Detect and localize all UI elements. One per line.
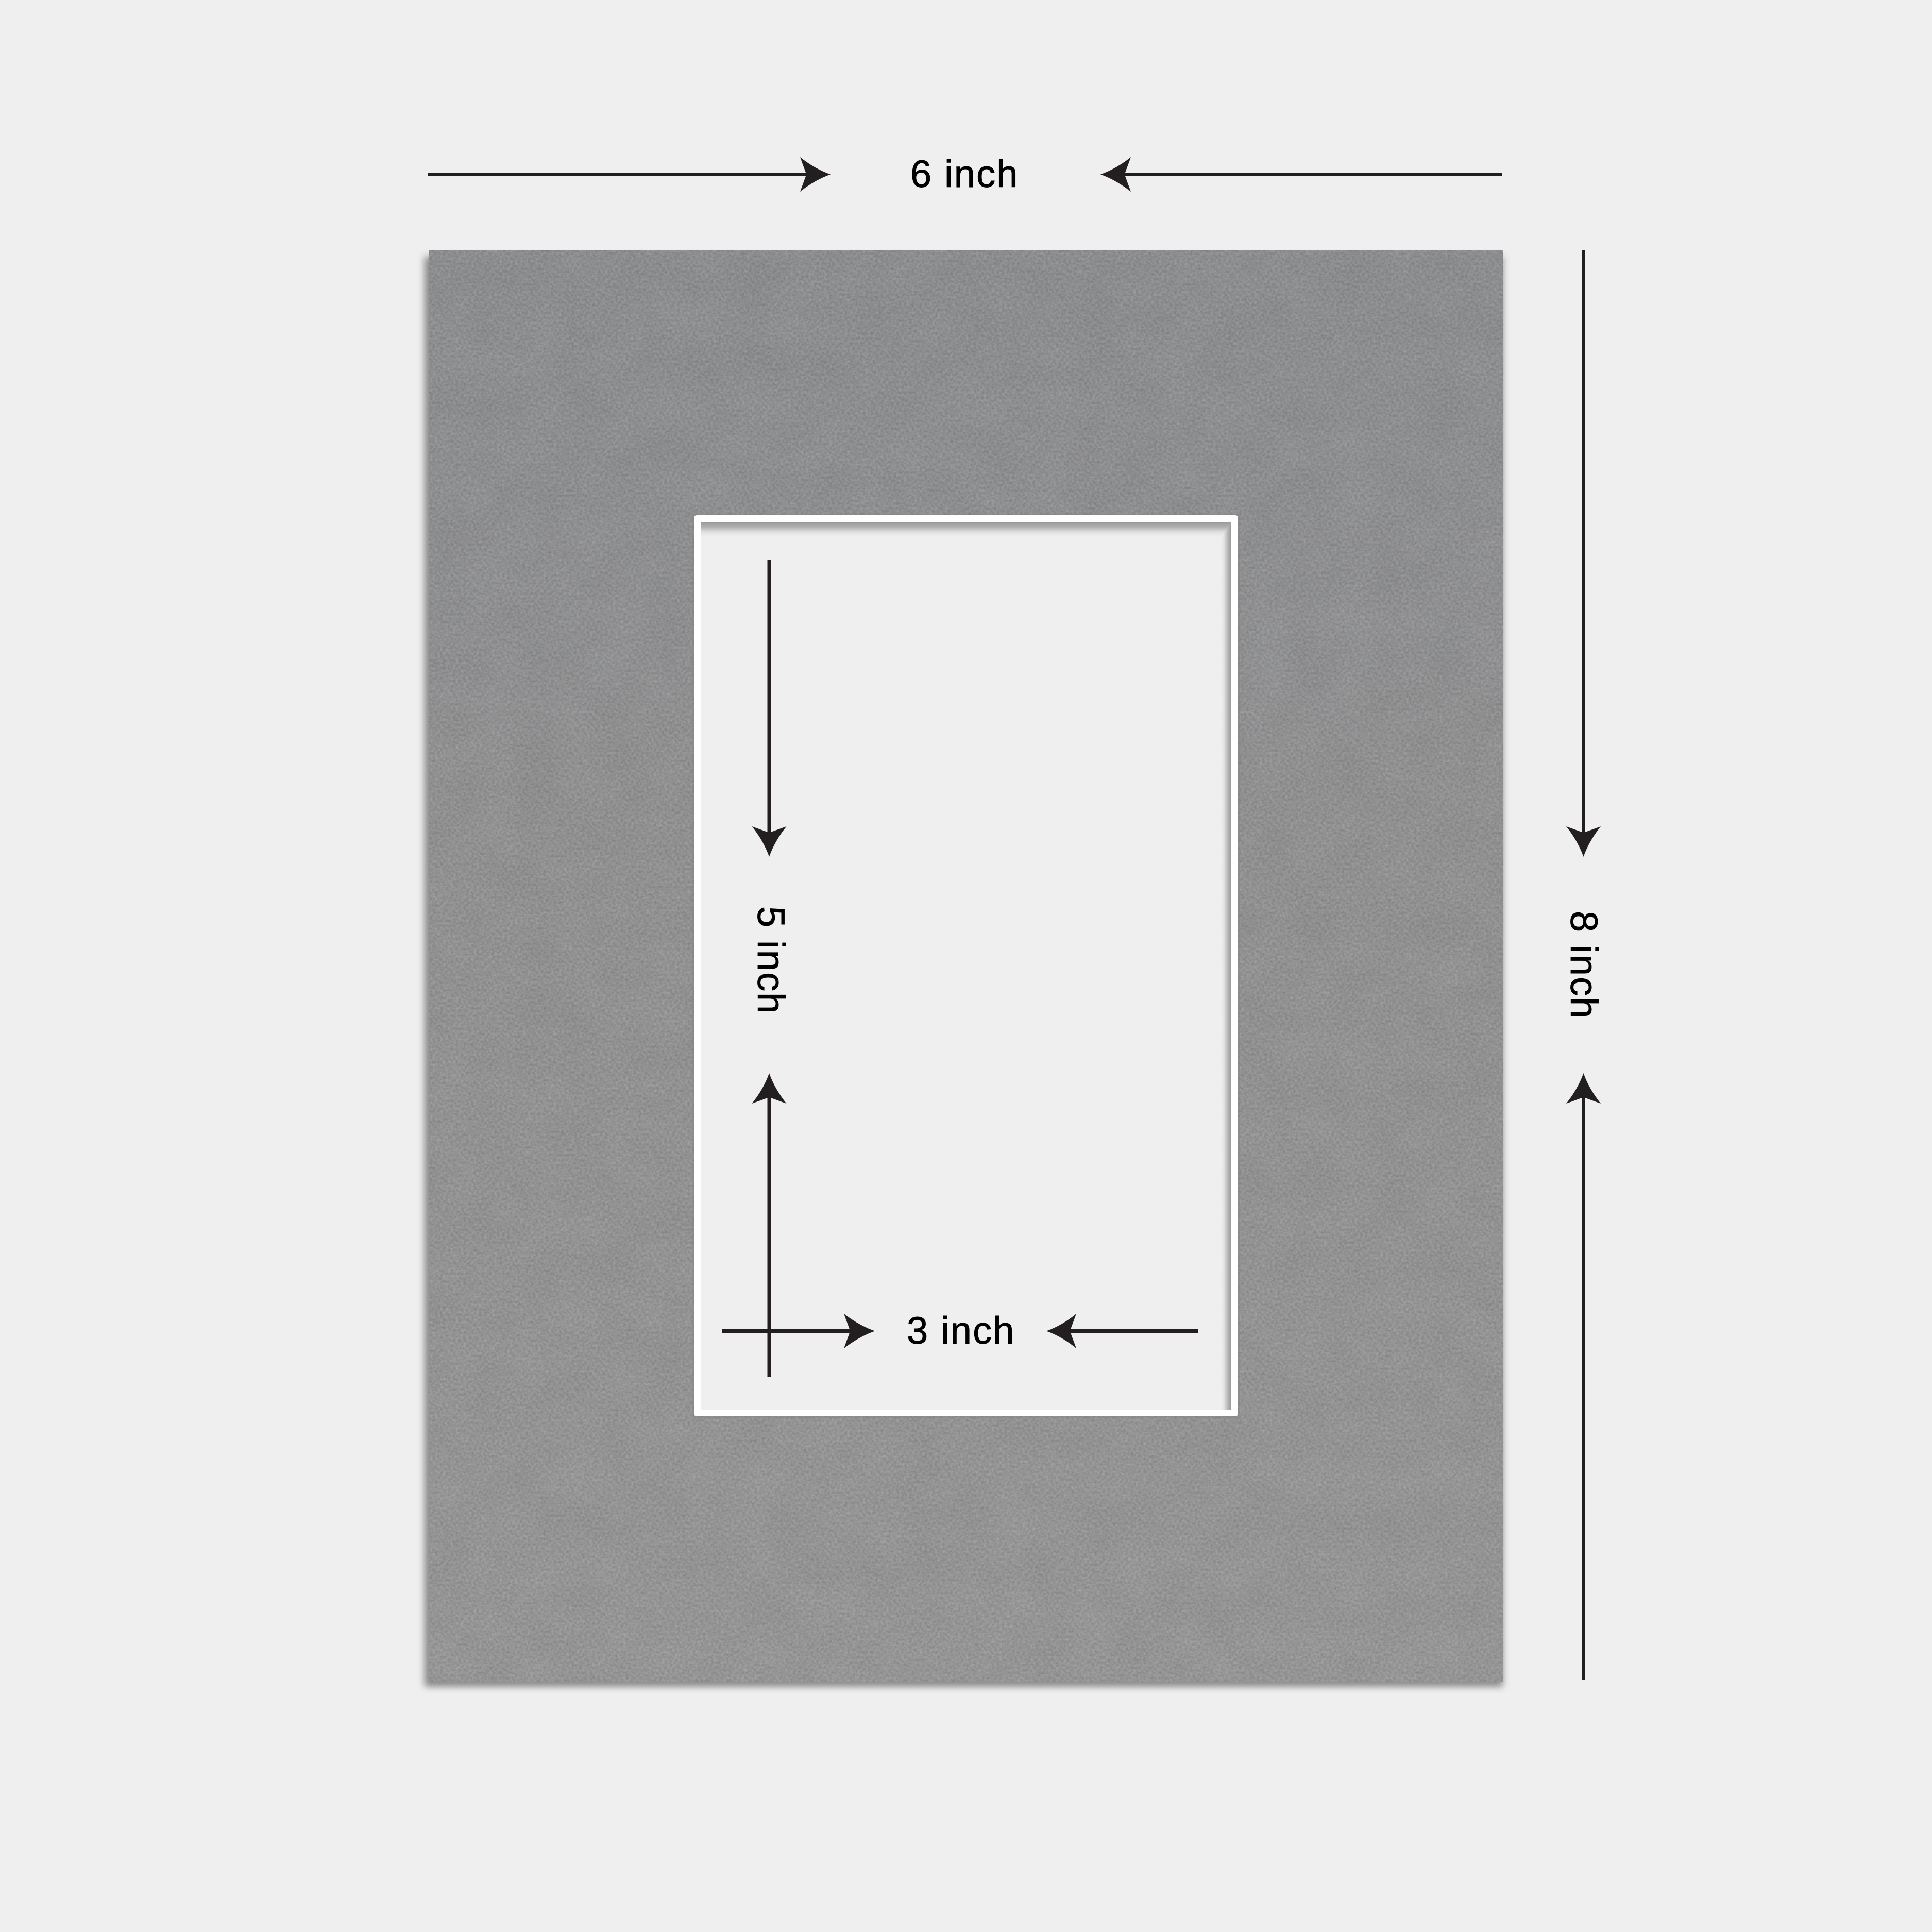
arrow: top right, pointing left [1100,157,1502,192]
arrow: window bottom left, pointing right [722,1314,875,1348]
arrow: right side upper, pointing down [1566,250,1601,857]
window opening [701,522,1231,1410]
arrow: window bottom right, pointing left [1046,1314,1198,1348]
mat textured surface [429,250,1503,1682]
label: 6 inch width: 6 inch [910,152,1019,195]
arrow: window upper, pointing down [752,560,786,857]
label: 3 inch width: 3 inch [907,1309,1015,1352]
mat drop shadow [425,257,1503,1687]
arrow: right side lower, pointing up [1566,1073,1601,1680]
panel: grey mat board with window [425,250,1503,1687]
arrow: top left, pointing right [428,157,831,192]
arrow: window lower, pointing up [752,1073,786,1377]
window bevel: white frame [692,514,1240,1418]
label: 8 inch height: 8 inch [1563,911,1605,1020]
label: 5 inch height: 5 inch [750,906,792,1015]
